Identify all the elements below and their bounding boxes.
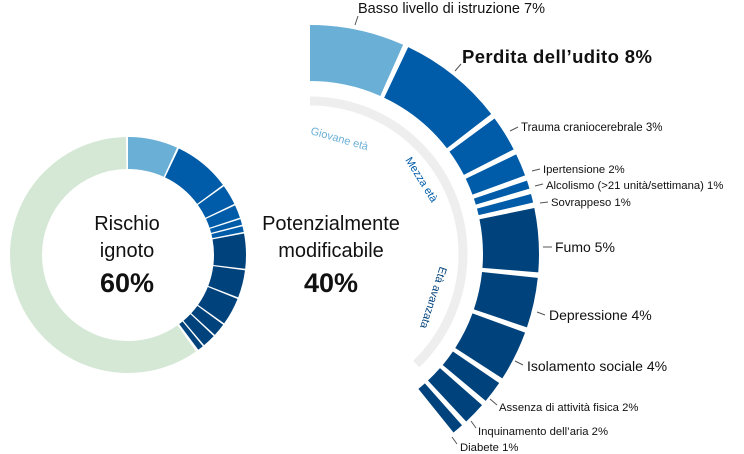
age arc: Mezza età [402,155,440,205]
text: potenzialmente modificabile: modificabile [278,240,384,262]
age arc: Età avanzata [417,265,449,331]
labels with leader lines: Perdita dell’udito 8% [462,46,652,67]
age arc [157,101,463,407]
labels with leader lines: Trauma craniocerebrale 3% [521,122,662,134]
text: potenzialmente modificabile: Potenzialmente [262,213,400,235]
labels with leader lines: Basso livello di istruzione 7% [358,1,545,17]
labels with leader lines: Ipertensione 2% [543,164,625,176]
text: potenzialmente modificabile: 40% [304,268,358,298]
labels with leader lines: Diabete 1% [460,442,518,454]
big segmented arc [109,53,511,454]
labels with leader lines: Fumo 5% [555,239,615,255]
labels with leader lines: Assenza di attività fisica 2% [499,402,638,414]
text: rischio ignoto: 60% [100,268,154,298]
text: rischio ignoto: Rischio [94,213,160,235]
labels with leader lines: Depressione 4% [549,307,652,323]
labels with leader lines: Isolamento sociale 4% [527,358,667,374]
age arc: Giovane età [309,125,370,153]
labels with leader lines: Alcolismo (>21 unità/settimana) 1% [546,180,723,192]
text: rischio ignoto: ignoto [100,240,154,262]
text: potenzialmente modificabile [262,213,400,298]
labels with leader lines [355,1,723,454]
labels with leader lines: Inquinamento dell’aria 2% [478,426,608,438]
labels with leader lines: Sovrappeso 1% [551,197,631,209]
small donut chart [26,153,230,357]
text: rischio ignoto [94,213,160,298]
